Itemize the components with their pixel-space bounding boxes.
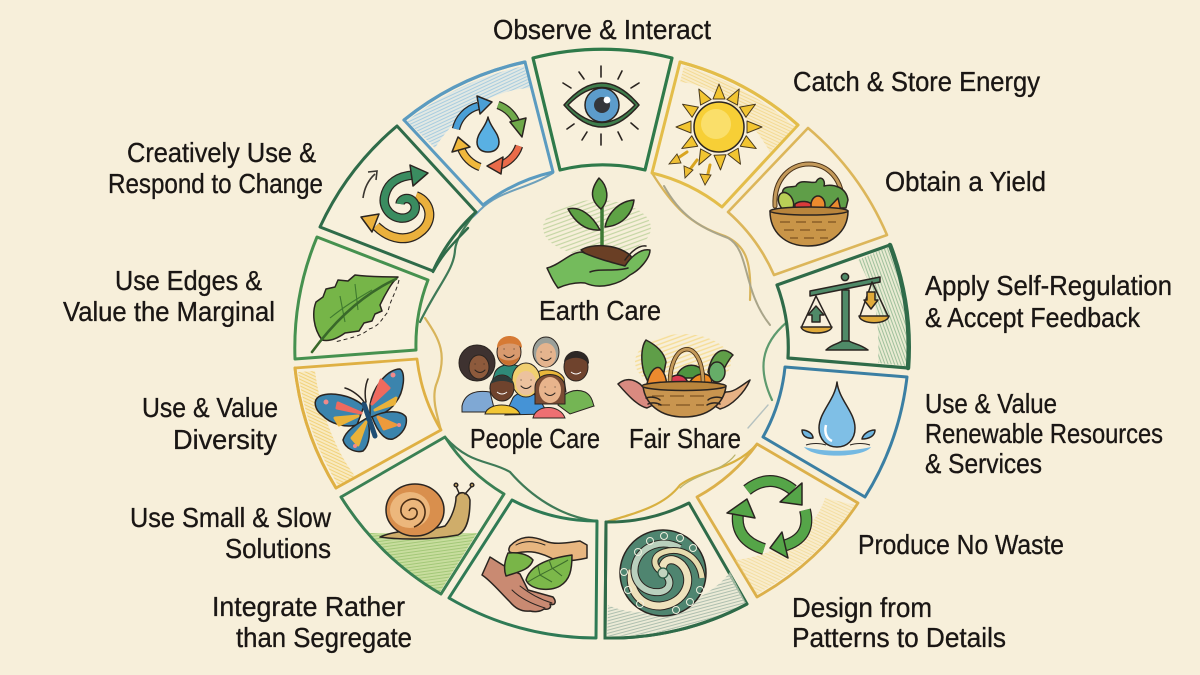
icon: balance scale xyxy=(801,273,889,350)
icon: eye xyxy=(563,66,639,145)
label: use and value diversity: Use & Value xyxy=(142,392,278,423)
label: apply self-regulation and accept feedback: & Accept Feedback xyxy=(925,302,1141,333)
panel: creatively use and respond to change xyxy=(320,126,476,271)
label: use and value diversity: Diversity xyxy=(173,424,277,455)
label: integrate rather than segregate: Integrate Rather xyxy=(212,591,405,622)
label: use edges and value the marginal: Value the Marginal xyxy=(63,296,275,327)
label: use edges and value the marginal xyxy=(63,265,275,327)
label: design from patterns to details: Design from xyxy=(792,592,932,623)
label: integrate rather than segregate xyxy=(212,591,412,653)
label: people care: People Care xyxy=(470,423,600,454)
icon: water cycle arrows xyxy=(452,96,526,174)
panel: integrate rather than segregate xyxy=(449,500,597,638)
icon: fair share basket with hands xyxy=(618,334,750,417)
icon: sun xyxy=(669,84,762,185)
label: use small and slow solutions: Use Small & Slow xyxy=(130,502,332,533)
label: use and value renewable resources and services: Renewable Resources xyxy=(925,418,1163,449)
panel: produce no waste xyxy=(697,444,858,597)
label: use small and slow solutions xyxy=(130,502,332,564)
icon: change spiral arrows xyxy=(361,165,429,238)
panel: use and value diversity xyxy=(295,359,441,488)
icon: water drop with splash xyxy=(802,382,875,456)
icon: people care group xyxy=(459,336,594,418)
panel: design from patterns to details xyxy=(605,503,747,638)
label: use edges and value the marginal: Use Edges & xyxy=(115,265,262,296)
connecting ribbons between panels xyxy=(420,173,787,522)
label: obtain a yield: Obtain a Yield xyxy=(885,166,1046,197)
icon: basket of vegetables xyxy=(770,164,848,246)
panel: observe and interact xyxy=(533,49,672,170)
icon: spiral pattern xyxy=(620,530,706,616)
panel: use small and slow solutions xyxy=(341,437,504,594)
icon: snail xyxy=(380,483,474,539)
label: creatively use and respond to change: Respond to Change xyxy=(108,168,323,199)
icon: hands holding leaves xyxy=(482,537,587,612)
panel: water cycle xyxy=(404,62,553,205)
icon: earth care seedling in hand xyxy=(543,178,651,288)
label: use and value diversity xyxy=(142,392,278,455)
icon: recycling arrows xyxy=(727,481,806,558)
label: design from patterns to details xyxy=(792,592,1006,653)
label: use and value renewable resources and services: Use & Value xyxy=(925,388,1057,419)
icon: butterfly xyxy=(315,369,406,452)
icon: leaf with dashed edge xyxy=(312,275,399,352)
label: use and value renewable resources and services: & Services xyxy=(925,448,1042,479)
label: use and value renewable resources and services xyxy=(925,388,1163,479)
label: apply self-regulation and accept feedback xyxy=(925,270,1172,333)
panel: use edges and value the marginal xyxy=(295,237,428,359)
panel: apply self-regulation xyxy=(777,245,909,368)
panel: use and value renewable resources xyxy=(763,367,907,497)
label: earth care: Earth Care xyxy=(539,295,661,326)
label: fair share: Fair Share xyxy=(629,423,741,454)
label: catch and store energy: Catch & Store Energy xyxy=(793,66,1040,97)
label: apply self-regulation and accept feedback: Apply Self-Regulation xyxy=(925,270,1172,301)
label: observe and interact: Observe & Interact xyxy=(493,14,711,45)
label: creatively use and respond to change xyxy=(108,137,323,199)
panel: catch and store energy xyxy=(652,62,798,207)
label: creatively use and respond to change: Creatively Use & xyxy=(127,137,316,168)
label: use small and slow solutions: Solutions xyxy=(225,533,331,564)
label: design from patterns to details: Patterns to Details xyxy=(792,622,1006,653)
label: integrate rather than segregate: than Segregate xyxy=(236,622,412,653)
label: produce no waste: Produce No Waste xyxy=(858,529,1064,560)
panel: obtain a yield xyxy=(728,128,887,275)
